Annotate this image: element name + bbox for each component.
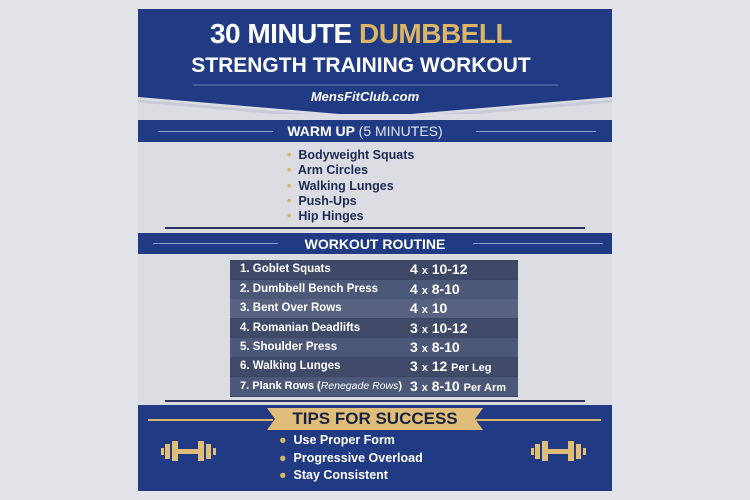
table: workout routine: 4 x 10-12 xyxy=(410,261,468,277)
table: workout routine: 3 x 10-12 xyxy=(410,320,468,336)
table: workout routine: 6. Walking Lunges xyxy=(240,360,341,372)
icon: dumbbell left xyxy=(161,441,216,461)
table: workout routine: 3 x 8-10 xyxy=(410,339,460,355)
table: workout routine: 4 x 10 xyxy=(410,300,447,316)
subtitle: STRENGTH TRAINING WORKOUT xyxy=(191,54,531,77)
list: warm up: • Push-Ups xyxy=(287,194,357,208)
list: warm up xyxy=(287,148,414,223)
table: workout routine xyxy=(230,260,518,397)
table: workout routine: 4 x 8-10 xyxy=(410,281,460,297)
table: workout routine: 7. Plank Rows (Renegade Rows) xyxy=(240,380,402,392)
list: warm up: • Hip Hinges xyxy=(287,209,364,223)
list: warm up: • Walking Lunges xyxy=(287,179,394,193)
panel: tips for success xyxy=(138,405,612,491)
list: tips xyxy=(279,433,423,482)
title: 30 MINUTE DUMBBELL xyxy=(210,18,512,49)
heading: warm up xyxy=(138,120,612,142)
table: workout routine: 1. Goblet Squats xyxy=(240,263,331,275)
panel: main background xyxy=(138,9,612,491)
banner: tips heading xyxy=(267,408,483,430)
list: tips: ● Use Proper Form xyxy=(279,433,395,447)
heading: workout routine: WORKOUT ROUTINE xyxy=(305,236,445,252)
table: workout routine: 4. Romanian Deadlifts xyxy=(240,322,360,334)
list: tips: ● Progressive Overload xyxy=(279,451,423,465)
header xyxy=(138,9,612,114)
icon: dumbbell right xyxy=(531,441,586,461)
website: MensFitClub.com xyxy=(311,89,419,104)
panel: tips for success: TIPS FOR SUCCESS xyxy=(292,409,458,428)
heading: workout routine xyxy=(138,233,612,254)
table: workout routine: 5. Shoulder Press xyxy=(240,341,337,353)
list: warm up: • Arm Circles xyxy=(287,163,368,177)
table: workout routine: 3 x 12 Per Leg xyxy=(410,358,492,374)
table: workout routine: 3 x 8-10 Per Arm xyxy=(410,378,506,394)
heading: warm up: WARM UP (5 MINUTES) xyxy=(287,123,443,139)
table: workout routine: 2. Dumbbell Bench Press xyxy=(240,283,378,295)
list: tips: ● Stay Consistent xyxy=(279,468,388,482)
table: workout routine: 3. Bent Over Rows xyxy=(240,302,342,314)
list: warm up: • Bodyweight Squats xyxy=(287,148,414,162)
